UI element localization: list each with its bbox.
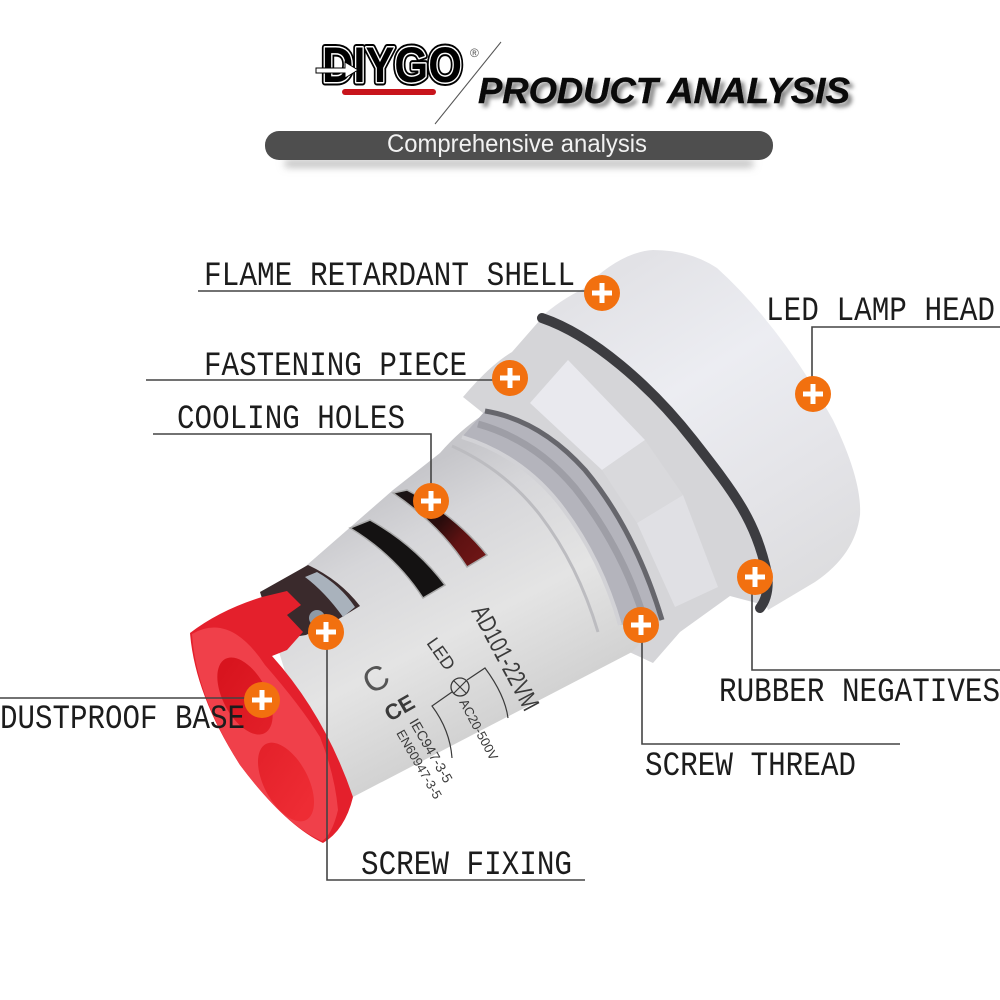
divider slash <box>435 42 501 124</box>
brand logo: DIYGO: DIYGO <box>322 37 462 93</box>
printed markings: IEC947-3-5 <box>406 716 456 786</box>
heading: product analysis: ANALYSIS <box>670 74 854 115</box>
heading: product analysis <box>478 70 854 115</box>
brand logo: DIYGO: ® <box>470 46 479 60</box>
red base <box>190 591 353 843</box>
screw thread <box>452 411 662 632</box>
callout: flame retardant shell: FLAME RETARDANT SHELL <box>204 258 575 296</box>
printed markings: CE <box>380 689 419 726</box>
product: LED indicator lamp <box>190 250 860 843</box>
collar <box>463 320 772 663</box>
printed markings: LED <box>423 634 459 674</box>
printed markings: C <box>356 657 396 702</box>
callout: dustproof base: DUSTPROOF BASE <box>0 701 245 739</box>
callout: fastening piece <box>146 348 528 396</box>
rubber ring <box>542 318 768 608</box>
callout: screw fixing: SCREW FIXING <box>361 847 572 885</box>
brand logo: DIYGO: DIYGO <box>322 37 462 93</box>
callout: cooling holes: COOLING HOLES <box>177 401 405 439</box>
callout: screw thread <box>623 607 900 786</box>
heading: product analysis: PRODUCT <box>482 74 665 115</box>
callout: flame retardant shell <box>198 258 620 311</box>
callout: fastening piece: FASTENING PIECE <box>204 348 467 386</box>
subtitle pill: comprehensive analysis <box>265 130 773 167</box>
subtitle pill: comprehensive analysis: Comprehensive analysis <box>387 130 647 158</box>
terminal recess with screw <box>260 565 360 640</box>
cooling slot 2 <box>393 490 487 567</box>
heading: product analysis: ANALYSIS <box>666 70 850 111</box>
callout: rubber negatives <box>719 559 1000 712</box>
brand logo: DIYGO: DIYGO <box>322 37 462 93</box>
callout: dustproof base <box>0 682 280 739</box>
printed markings: AC20-500V <box>456 696 501 763</box>
callout: screw fixing <box>308 614 585 885</box>
printed markings <box>356 601 544 801</box>
cooling slot 1 <box>350 520 445 598</box>
lamp head <box>540 250 860 610</box>
callout: screw thread: SCREW THREAD <box>645 748 856 786</box>
printed markings: AD101-22VM <box>466 601 544 715</box>
printed markings: EN60947-3-5 <box>393 727 445 801</box>
lamp body <box>262 415 662 797</box>
callout: LED lamp head <box>766 293 1000 412</box>
callout: cooling holes <box>153 401 449 519</box>
heading: product analysis: PRODUCT <box>478 70 661 111</box>
